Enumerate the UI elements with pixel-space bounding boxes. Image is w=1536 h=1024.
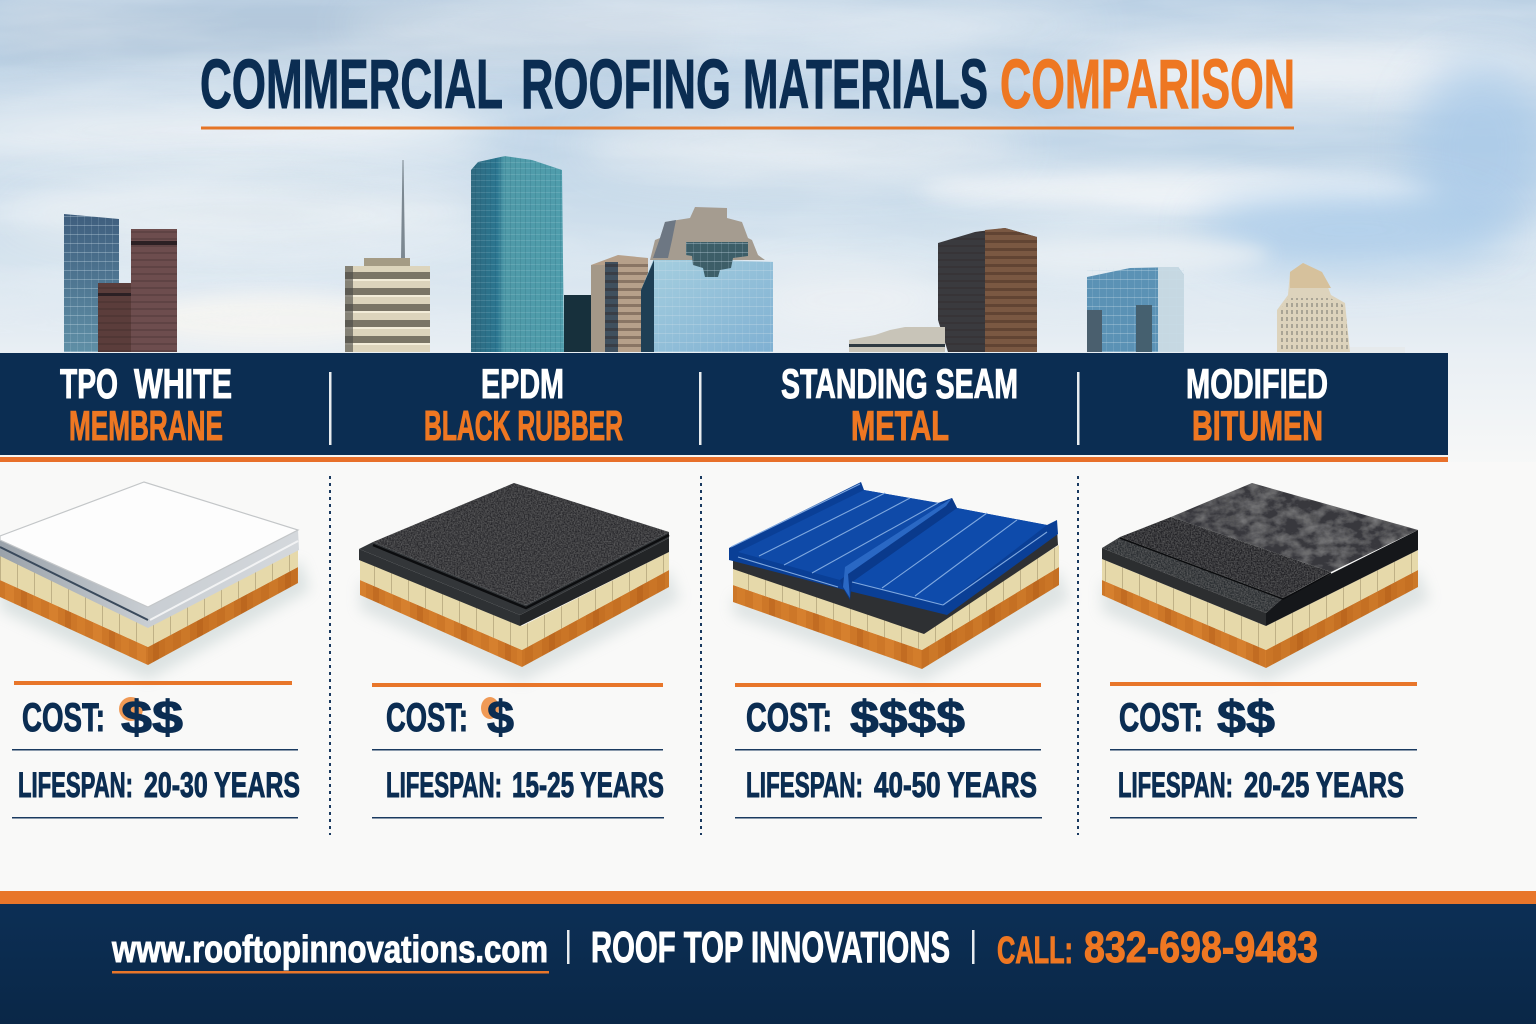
lifespan row: 40-50 YEARS xyxy=(874,766,1037,805)
column heading: EPDM Black Rubber: BLACK RUBBER xyxy=(424,402,623,449)
title xyxy=(200,45,1295,130)
panel: EPDM black rubber xyxy=(359,483,680,818)
column heading: TPO White Membrane: TPO xyxy=(60,360,118,407)
title: COMMERCIAL xyxy=(200,45,503,123)
header band xyxy=(0,353,1448,462)
lifespan row: LIFESPAN: xyxy=(1118,766,1233,805)
footer xyxy=(0,891,1536,1024)
cost row: $$ xyxy=(1217,691,1275,743)
roof sample: modified bitumen xyxy=(1102,483,1430,682)
cost row xyxy=(372,683,663,750)
cost row xyxy=(12,681,298,750)
column heading: Standing Seam Metal: METAL xyxy=(851,402,949,449)
building: blue glass curved tower xyxy=(1087,267,1184,352)
lifespan row: LIFESPAN: xyxy=(386,766,502,805)
cost row: $$$$ xyxy=(850,691,965,743)
lifespan row: LIFESPAN: xyxy=(18,766,133,805)
cost row: COST: xyxy=(746,696,832,740)
building: small white annex xyxy=(1350,347,1405,353)
company name: ROOF TOP INNOVATIONS xyxy=(591,923,950,972)
title: MATERIALS xyxy=(743,45,988,123)
panel: modified bitumen xyxy=(1102,483,1430,818)
title: COMPARISON xyxy=(1000,45,1295,123)
building: dark low tower xyxy=(564,295,591,352)
column heading: Standing Seam Metal xyxy=(781,360,1018,449)
lifespan row: 20-30 YEARS xyxy=(144,766,300,805)
panel: TPO white membrane xyxy=(0,482,310,818)
lifespan row xyxy=(372,766,664,818)
panel: standing seam metal xyxy=(729,482,1070,818)
column heading: Modified Bitumen: MODIFIED xyxy=(1186,360,1328,407)
column heading: Modified Bitumen: BITUMEN xyxy=(1192,402,1323,449)
building: teal skyscraper xyxy=(471,156,564,352)
building: low white building xyxy=(849,327,945,352)
roof sample: standing seam metal xyxy=(729,482,1070,682)
column heading: Standing Seam Metal: STANDING SEAM xyxy=(781,360,1018,407)
cost row: COST: xyxy=(386,696,468,740)
column heading: TPO White Membrane: MEMBRANE xyxy=(69,402,223,449)
lifespan row xyxy=(735,766,1042,818)
building: stepped-crown glass tower xyxy=(641,207,773,352)
cost row: COST: xyxy=(22,696,105,740)
column heading: Modified Bitumen xyxy=(1186,360,1328,449)
cost row: $ xyxy=(487,691,514,743)
column heading: TPO White Membrane xyxy=(60,360,232,449)
city skyline xyxy=(64,156,1405,353)
website: www.rooftopinnovations.com xyxy=(111,929,548,971)
column heading: EPDM Black Rubber xyxy=(424,360,623,449)
lifespan row xyxy=(1110,766,1417,818)
building: brown towers xyxy=(98,229,177,352)
building: striped tower with antenna xyxy=(345,160,430,352)
column heading: TPO White Membrane: WHITE xyxy=(134,360,232,407)
lifespan row: LIFESPAN: xyxy=(746,766,863,805)
cost row xyxy=(1110,682,1417,750)
lifespan row xyxy=(12,766,300,818)
roof sample: EPDM xyxy=(359,483,680,682)
cost row xyxy=(735,683,1041,750)
cost row: $$ xyxy=(121,691,183,743)
phone: CALL: xyxy=(997,930,1073,972)
phone xyxy=(997,923,1318,972)
building: cream tower xyxy=(1277,263,1350,352)
phone: 832-698-9483 xyxy=(1084,923,1318,972)
roof sample: TPO xyxy=(0,482,310,680)
building: dark brown tower xyxy=(938,228,1037,352)
title: ROOFING xyxy=(521,45,731,123)
lifespan row: 15-25 YEARS xyxy=(512,766,664,805)
building: tan tower xyxy=(591,255,648,352)
column heading: EPDM Black Rubber: EPDM xyxy=(481,360,564,407)
building: blue glass tower xyxy=(64,214,119,352)
lifespan row: 20-25 YEARS xyxy=(1244,766,1404,805)
cost row: COST: xyxy=(1119,696,1203,740)
